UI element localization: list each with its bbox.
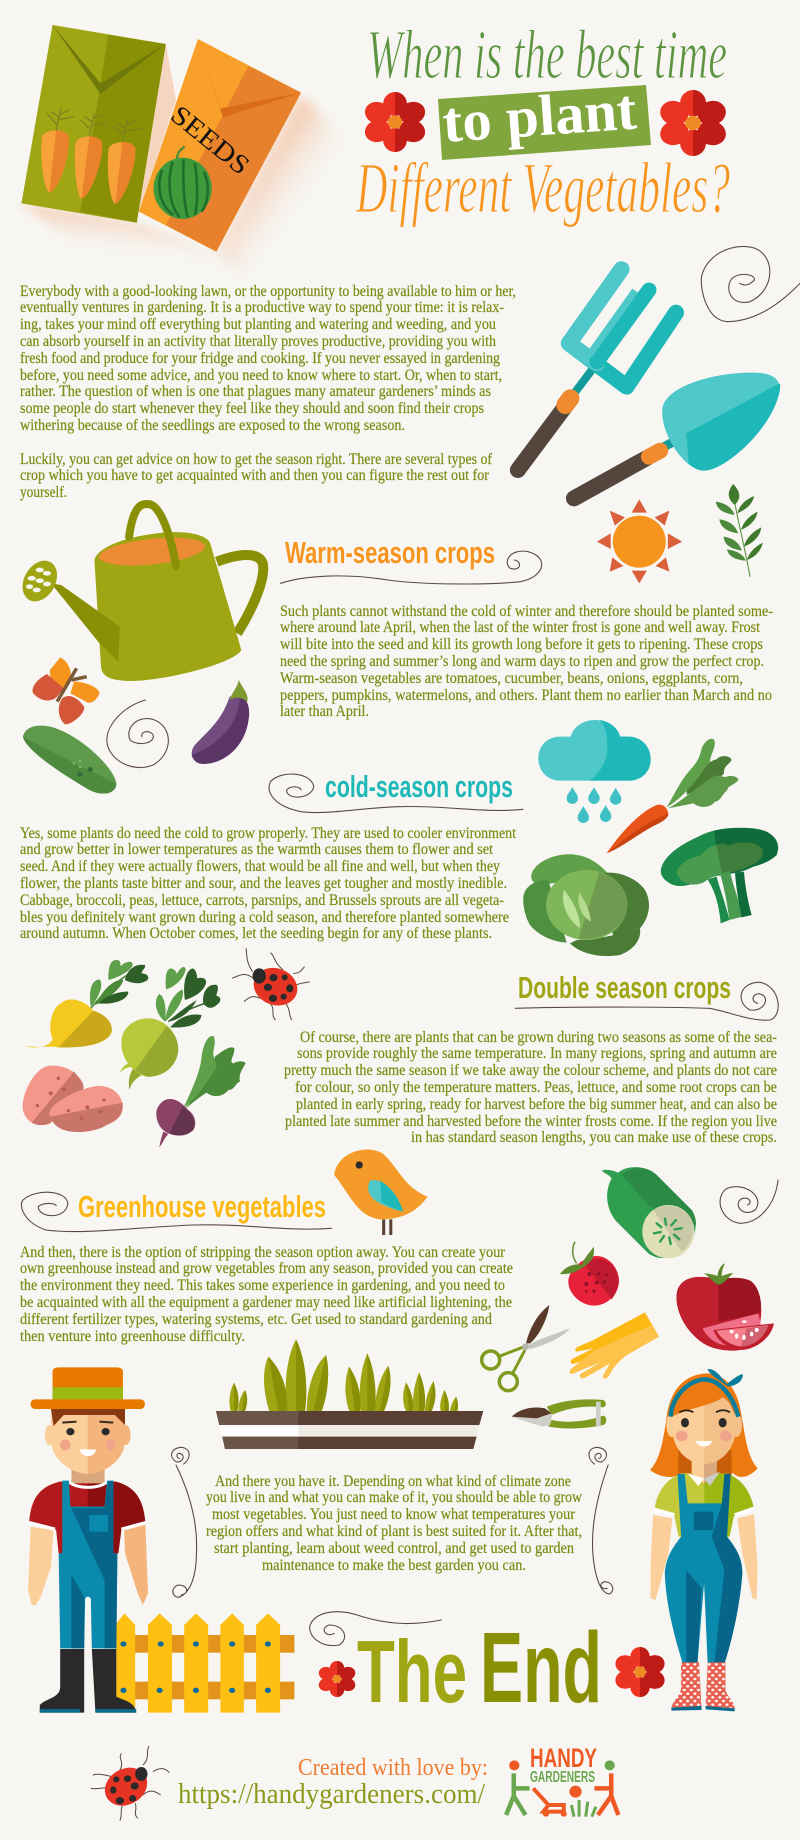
text: introduction: some people do start whenever they feel like they should and soon find their crops [20, 400, 484, 417]
text: greenhouse body: different fertilizer types, watering systems, etc. Get used to standard gardening and [20, 1311, 492, 1328]
decorative swirl above The End [310, 1612, 441, 1646]
icon: flower left of The End [316, 1661, 358, 1697]
heading: Cold-season crops [269, 769, 523, 813]
heading: Warm-season crops: Warm-season crops [285, 535, 495, 570]
text: cold-season body: around autumn. When October comes, let the seeding begin for any of these plants. [20, 925, 492, 942]
text: introduction: crop which you have to get acquainted with and then you can figure the rest out for [20, 467, 490, 484]
text: warm-season body [280, 603, 773, 720]
logo: Handy Gardeners [506, 1743, 618, 1817]
icon: sun [597, 499, 682, 583]
text: closing paragraph with brackets: And there you have it. Depending on what kind of climate zone [215, 1473, 571, 1490]
icon: flower right of banner [655, 90, 731, 156]
text: closing paragraph with brackets: start planting, learn about weed control, and get used to garden [214, 1540, 574, 1557]
text: cold-season body: flower, the plants taste bitter and sour, and the leaves get tougher and mostly inedible. [20, 875, 507, 892]
text: introduction: yourself. [20, 484, 67, 501]
text: cold-season body: Yes, some plants do need the cold to grow properly. They are used to cooler environment [20, 825, 517, 842]
icon: pruning shears [512, 1399, 606, 1428]
text: warm-season body: where around late April, when the last of the winter frost is gone and well away. Frost [280, 619, 761, 636]
illustration: picket fence [116, 1613, 294, 1713]
text: warm-season body: need the spring and summer’s long and warm days to ripen and grow the perfect crop. [280, 653, 764, 670]
text: introduction: fresh food and produce for your fridge and cooking. If you never essayed in gardening [20, 350, 500, 367]
text: closing paragraph with brackets: most vegetables. You just need to know what temperatures your [212, 1506, 576, 1523]
icon: ladybug bottom [91, 1746, 169, 1821]
icon: yellow turnip [23, 960, 148, 1047]
text: warm-season body: Such plants cannot withstand the cold of winter and therefore should be planted some- [280, 603, 773, 620]
illustration: farmer [28, 1367, 148, 1713]
text: cold-season body: seed. And if they were actually flowers, that would be all fine and well, but when they [20, 858, 500, 875]
text: cold-season body: Cabbage, broccoli, peas, lettuce, carrots, parsnips, and Brussels sprouts are all vegeta- [20, 892, 504, 909]
text: cold-season body: and grow better in lower temperatures as the warmth causes them to flower and set [20, 841, 494, 858]
decorative swirl by eggplant [107, 700, 168, 768]
text: double season body: in has standard season lengths, you can make use of these crops. [411, 1129, 777, 1146]
text: introduction: ing, takes your mind off everything but planting and watering and weeding, and you [20, 316, 496, 333]
title: The End: End [480, 1612, 602, 1724]
decorative swirl by cucumber [720, 1180, 778, 1223]
icon: tomato [676, 1263, 774, 1351]
icon: broccoli [661, 828, 778, 923]
text: greenhouse body: the environment they need. This takes some experience in gardening, and you need to [20, 1277, 505, 1294]
title: The End: The [357, 1622, 467, 1721]
decorative swirl top right [701, 246, 800, 322]
icon: carrot [607, 739, 738, 853]
illustration: gardener woman [650, 1369, 758, 1711]
icon: cabbage [523, 854, 649, 956]
icon: planter box with plants [216, 1339, 483, 1449]
heading: Greenhouse vegetables [21, 1189, 332, 1232]
text: warm-season body: later than April. [280, 703, 369, 720]
icon: bird [334, 1149, 428, 1235]
icon: trowel [574, 373, 780, 498]
icon: potatoes [23, 1066, 123, 1132]
text: website url: https://handygardeners.com/ [178, 1778, 486, 1810]
icon: gardening gloves [570, 1312, 659, 1378]
logo: Handy Gardeners: GARDENERS [530, 1769, 595, 1786]
heading: Warm-season crops [281, 535, 542, 584]
title banner [438, 85, 651, 160]
icon: rain cloud [538, 720, 651, 823]
text: greenhouse body: And then, there is the option of stripping the season option away. You can create your [20, 1244, 506, 1261]
icon: garden fork [518, 269, 676, 470]
icon: sliced cucumber [602, 1167, 696, 1258]
text: introduction [20, 283, 516, 501]
heading: Cold-season crops: cold-season crops [325, 769, 513, 804]
text: greenhouse body: own greenhouse instead and grow vegetables from any season, provided you can create [20, 1260, 513, 1277]
text: greenhouse body: then venture into greenhouse difficulty. [20, 1328, 245, 1345]
text: greenhouse body [20, 1244, 513, 1345]
icon: watering can [17, 504, 263, 681]
icon: flower left of banner [360, 92, 430, 152]
text: closing paragraph with brackets: region offers and what kind of plant is best suited for it. After that, [206, 1523, 582, 1540]
text: introduction: Everybody with a good-looking lawn, or the opportunity to being available to him or her, [20, 283, 516, 300]
text: cold-season body: bles you definitely want grown during a cold season, and therefore planted somewhere [20, 909, 509, 926]
text: created with love by: Created with love by: [298, 1755, 488, 1781]
text: introduction: can absorb yourself in an activity that literally proves productive, providing you with [20, 333, 496, 350]
icon: beet [156, 1036, 246, 1147]
icon: leaf branch [716, 484, 763, 577]
title [355, 17, 730, 228]
heading: Double season crops [515, 970, 778, 1020]
logo: Handy Gardeners: HANDY [530, 1743, 597, 1773]
text: double season body [284, 1029, 777, 1146]
text: closing paragraph with brackets: you live in and what you can make of it, you should be able to grow [206, 1489, 583, 1506]
text: introduction: rather. The question of when is one that plagues many amateur gardeners’ minds as [20, 383, 491, 400]
title: The End [357, 1612, 602, 1724]
text: warm-season body: peppers, pumpkins, watermelons, and others. Plant them no earlier than March and no [280, 687, 772, 704]
icon: strawberry [560, 1242, 619, 1306]
text: cold-season body [20, 825, 517, 942]
text: warm-season body: Warm-season vegetables are tomatoes, cucumber, beans, onions, eggplants, corn, [280, 670, 743, 687]
label: SEEDS: SEEDS [165, 99, 256, 181]
text: closing paragraph with brackets [172, 1447, 613, 1597]
text: introduction: withering because of the seedlings are exposed to the wrong season. [20, 417, 405, 434]
heading: Greenhouse vegetables: Greenhouse vegetables [78, 1189, 326, 1224]
icon: flower right of The End [612, 1647, 668, 1697]
icon: eggplant [192, 680, 249, 764]
text: closing paragraph with brackets: maintenance to make the best garden you can. [262, 1557, 526, 1574]
icon: green turnip [120, 967, 220, 1090]
text: introduction: before, you need some advice, and you need to know where to start. Or, when to start, [20, 367, 502, 384]
text: warm-season body: will bite into the seed and kill its growth long before it gets to ripening. These crops [280, 636, 763, 653]
title line: to plant: to plant [440, 77, 639, 155]
illustration: seed packets [21, 25, 342, 280]
text: introduction: eventually ventures in gardening. It is a productive way to spend your time: it is relax- [20, 299, 504, 316]
icon: butterfly [33, 657, 99, 724]
icon: cucumber [23, 726, 116, 794]
text: greenhouse body: be acquainted with all the equipment a gardener may need like artificial lightening, the [20, 1294, 512, 1311]
icon: ladybug [232, 948, 310, 1020]
text: introduction: Luckily, you can get advice on how to get the season right. There are several types of [20, 451, 493, 468]
icon: scissors [482, 1305, 570, 1391]
